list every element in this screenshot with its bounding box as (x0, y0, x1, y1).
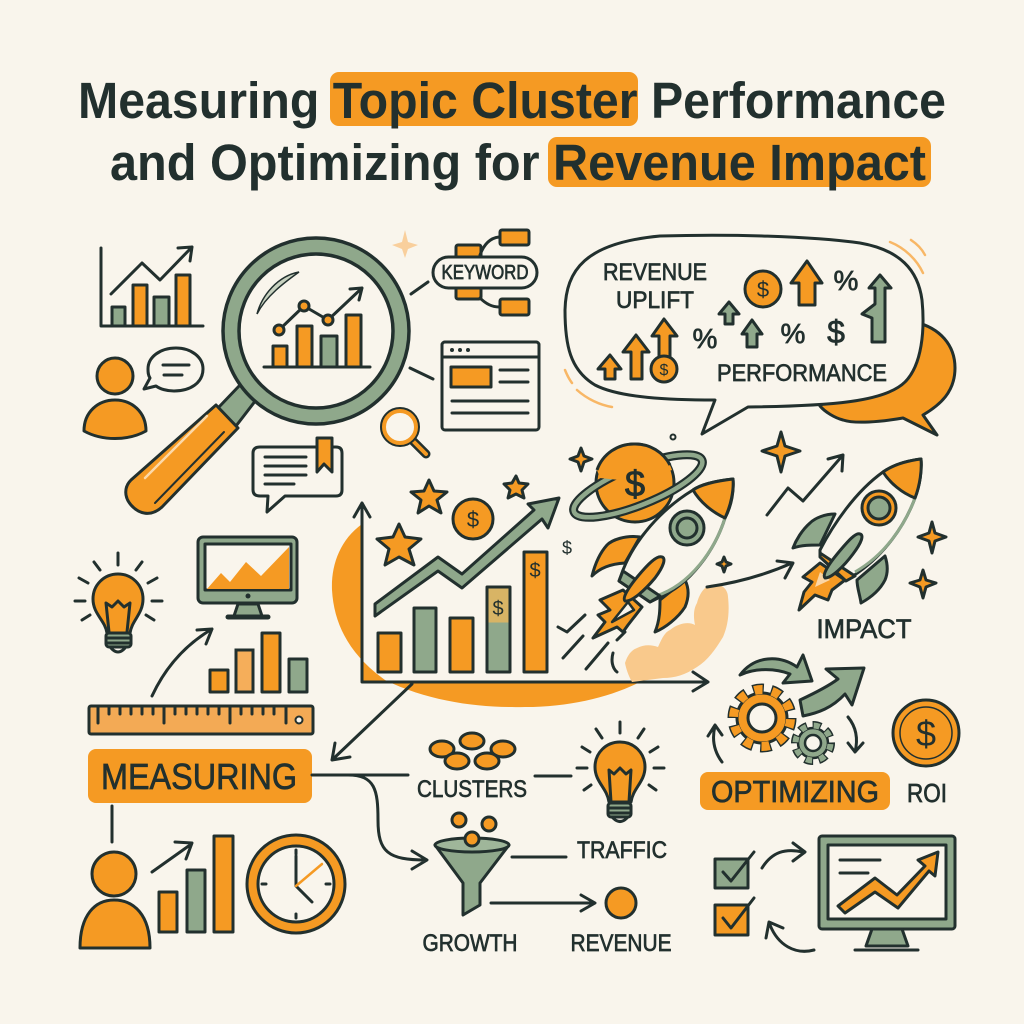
icon: small bar chart top left (101, 247, 203, 326)
icon: ROI coin (893, 700, 959, 766)
panel: central growth chart: $ (492, 598, 504, 620)
icon: small bar chart over ruler (210, 633, 307, 692)
icon: planet with dollar: $ (625, 463, 645, 504)
panel: revenue speech bubble: REVENUE (603, 259, 707, 286)
growth label: GROWTH (422, 930, 518, 957)
measuring label (88, 749, 312, 803)
clusters label: CLUSTERS (417, 776, 527, 803)
icon: cluster coins (430, 733, 515, 769)
icon: monitor with chart (198, 537, 297, 617)
icon: person with bars and clock (80, 835, 345, 948)
impact label: IMPACT (816, 614, 912, 644)
panel: central growth chart: $ (467, 507, 479, 532)
panel: revenue speech bubble: $ (757, 277, 769, 302)
optimizing label: OPTIMIZING (711, 774, 879, 809)
icon: smoke cloud (625, 584, 729, 682)
arrow: rocket to impact (707, 561, 793, 587)
ROI label: ROI (907, 778, 947, 808)
arrow: curved up to chart (152, 629, 212, 696)
keyword tree: KEYWORD (442, 262, 528, 284)
icon: ROI coin: $ (916, 713, 936, 754)
revenue label: REVENUE (570, 930, 672, 957)
panel: revenue speech bubble: % (693, 323, 717, 354)
panel: revenue speech bubble: % (781, 318, 805, 349)
icon: funnel (435, 813, 509, 915)
icon: impact rocket (793, 459, 921, 610)
icon: person with speech bubble (84, 348, 203, 438)
icon: planet with dollar: $ (625, 463, 645, 504)
icon: browser window (410, 342, 539, 430)
panel: revenue speech bubble: % (834, 265, 858, 296)
icon: main rocket (558, 479, 733, 672)
panel: revenue speech bubble: PERFORMANCE (717, 360, 887, 387)
arrow: diagonal from chart to measuring (332, 684, 412, 760)
icon: sparkle (392, 230, 418, 258)
icon: revenue dot (606, 888, 636, 918)
panel: revenue speech bubble: UPLIFT (616, 287, 694, 314)
icon: ruler (89, 706, 313, 734)
panel: revenue speech bubble: $ (827, 314, 845, 350)
icon: light bulb left (75, 553, 162, 652)
title: Measuring Topic Cluster Performance (78, 72, 946, 129)
arrow: funnel to revenue (491, 895, 595, 911)
panel: central growth chart (332, 476, 708, 707)
panel: revenue speech bubble (565, 235, 955, 435)
connectors: flow from measuring (112, 775, 427, 869)
panel: central growth chart: $ (529, 560, 541, 582)
icon: checklist (715, 843, 814, 951)
panel: central growth chart: $ (562, 538, 572, 558)
traffic label: TRAFFIC (577, 837, 667, 864)
icon: optimizing gears and arrows (708, 655, 864, 762)
icon: planet with dollar (567, 434, 709, 529)
title (78, 72, 946, 191)
panel: revenue speech bubble: $ (660, 362, 669, 379)
icon: sparkles near rocket (570, 448, 731, 572)
icon: small magnifier (384, 411, 426, 454)
icon: magnifying glass with chart (126, 238, 409, 513)
keyword tree (411, 230, 537, 315)
title: and Optimizing for Revenue Impact (110, 134, 926, 191)
icon: light bulb middle (535, 722, 664, 822)
icon: monitor with growth chart (819, 836, 955, 950)
icon: chat bubble with bookmark (253, 438, 342, 512)
measuring label: MEASURING (101, 756, 297, 797)
icon: impact sparkles and trend (762, 432, 946, 598)
